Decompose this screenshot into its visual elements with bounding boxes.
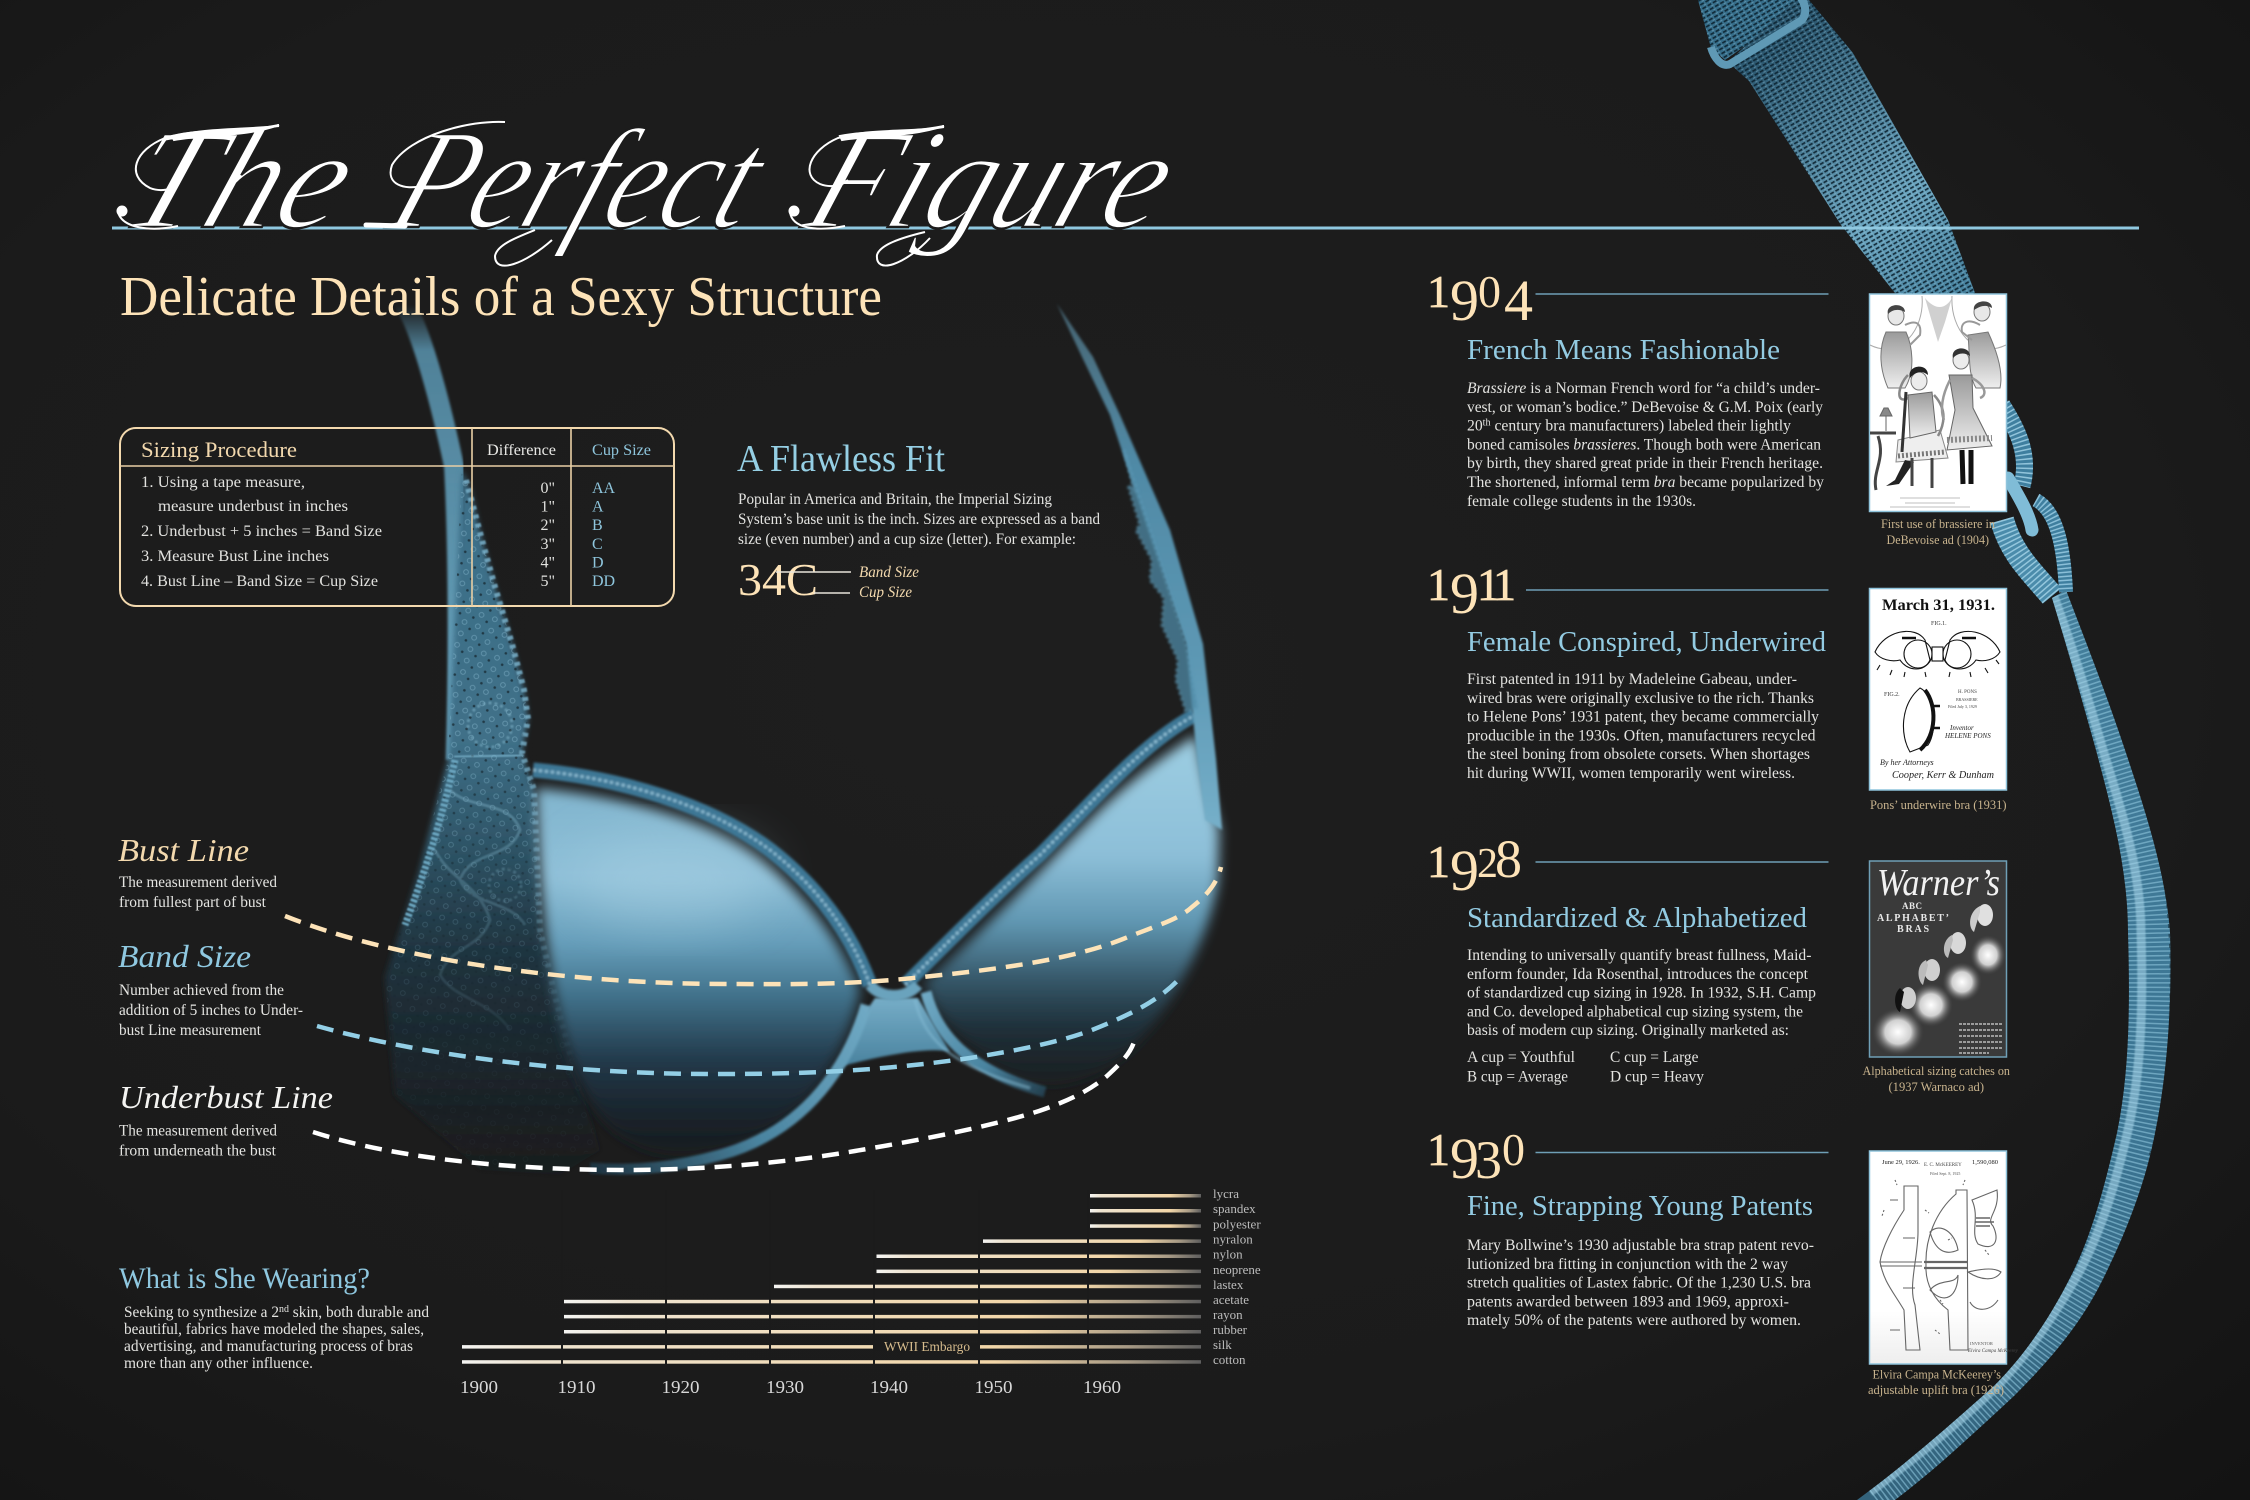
what is she wearing text: beautiful, fabrics have modeled the shapes, sales,: [124, 1321, 424, 1338]
sizing table: 5": [540, 573, 555, 590]
section 1904: female college students in the 1930s.: [1467, 493, 1696, 510]
figure 2: underwire patent: Cooper, Kerr & Dunham: [1892, 769, 1994, 781]
figure 3: Warner's ad: BRAS: [1897, 924, 1929, 935]
sizing table: Sizing Procedure: [141, 437, 297, 462]
section 1904: [1427, 266, 1828, 510]
figure 2: underwire patent: FIG.2.: [1884, 692, 1900, 698]
band size dashed curve: [317, 978, 1180, 1074]
fabric timeline chart: 1950: [974, 1377, 1012, 1397]
what is she wearing text: What is She Wearing?: [119, 1262, 370, 1295]
fabric timeline chart: 1920: [662, 1377, 700, 1397]
section 1928: A cup = Youthful: [1467, 1049, 1575, 1066]
section 1928: enform founder, Ida Rosenthal, introduces the concept: [1467, 966, 1809, 983]
underbust line label: The measurement derived: [119, 1122, 277, 1140]
title: The: [106, 100, 378, 258]
bust line label: from fullest part of bust: [119, 894, 267, 911]
sizing table: B: [592, 517, 603, 534]
underbust line label: [119, 1079, 333, 1160]
fabric timeline chart: silk: [1213, 1337, 1232, 1352]
year 1928: 1: [1427, 836, 1450, 887]
elastic strap: [1850, 585, 2180, 1500]
clip: [2008, 478, 2032, 530]
what is she wearing text: nd: [279, 1304, 289, 1315]
sizing table: DD: [592, 573, 615, 590]
sizing table: 0": [540, 480, 555, 497]
right lace: [1124, 450, 1198, 712]
fabric timeline chart: 1940: [870, 1377, 908, 1397]
a flawless fit: Popular in America and Britain, the Imperial Sizing: [738, 491, 1052, 508]
year 1911: 1: [1427, 559, 1450, 610]
bust line label: The measurement derived: [119, 874, 277, 891]
section 1911: the steel boning from obsolete corsets. When shortages: [1467, 746, 1810, 763]
year 1904: 4: [1504, 268, 1533, 333]
what is she wearing text: [119, 1262, 429, 1372]
section 1928: [1427, 829, 1828, 1086]
bust line label: [118, 832, 277, 911]
band size label: Number achieved from the: [119, 982, 284, 999]
fabric timeline chart: 1930: [766, 1377, 804, 1397]
year 1928: 8: [1495, 829, 1522, 889]
bra photograph: [385, 300, 1222, 1175]
a flawless fit: [737, 438, 1100, 605]
caption 1937: (1937 Warnaco ad): [1888, 1079, 1984, 1094]
section 1904: by birth, they shared great pride in their French heritage.: [1467, 455, 1823, 472]
caption 1904: DeBevoise ad (1904): [1886, 532, 1989, 547]
figure 2: underwire patent: FIG.1.: [1931, 621, 1947, 627]
fabric timeline chart: cotton: [1213, 1352, 1246, 1367]
bust line dashed curve: [285, 867, 1221, 984]
caption 1926: Elvira Campa McKeerey’s: [1872, 1366, 2001, 1382]
section 1904: Brassiere is a Norman French word for “a child’s under-: [1467, 380, 1820, 397]
bust line label: Bust Line: [118, 832, 249, 868]
section 1911: First patented in 1911 by Madeleine Gabeau, under-: [1467, 671, 1797, 688]
fabric timeline chart: rubber: [1213, 1322, 1248, 1337]
webbing above slider: [1698, 0, 1802, 60]
section 1928: C cup = Large: [1610, 1049, 1699, 1066]
sizing table: Cup Size: [592, 442, 651, 459]
section 1911: to Helene Pons’ 1931 patent, they became commercially: [1467, 708, 1819, 726]
sizing table: 4": [540, 554, 555, 572]
figure 2: underwire patent: H. PONS: [1958, 690, 1977, 695]
section 1911: Female Conspired, Underwired: [1467, 626, 1826, 658]
figure 2: underwire patent: March 31, 1931.: [1882, 597, 1995, 614]
year 1928: 9: [1450, 838, 1479, 903]
section 1930: patents awarded between 1893 and 1969, approxi-: [1467, 1294, 1789, 1310]
title rule: [112, 226, 2139, 230]
year 1911: 1: [1477, 559, 1500, 610]
figure 4: patent drawing: INVENTOR: [1970, 1341, 1993, 1346]
sizing table: 2. Underbust + 5 inches = Band Size: [141, 523, 382, 540]
figure 4: patent drawing: June 29, 1926.: [1882, 1159, 1920, 1166]
year 1904: 1: [1427, 266, 1450, 317]
year 1930: 9: [1450, 1126, 1479, 1191]
fabric timeline chart: lycra: [1213, 1186, 1239, 1201]
section 1911: wired bras were originally exclusive to the rich. Thanks: [1467, 690, 1814, 707]
year 1904: 9: [1450, 268, 1479, 333]
fabric timeline chart: 1960: [1083, 1377, 1121, 1397]
sizing table: 4. Bust Line – Band Size = Cup Size: [141, 573, 378, 590]
fabric timeline chart: [460, 1186, 1261, 1397]
title: [106, 100, 1198, 266]
section 1904: century bra manufacturers) labeled their lightly: [1491, 418, 1791, 434]
a flawless fit: 34C: [738, 554, 818, 605]
gore: [842, 998, 950, 1066]
sizing table: Difference: [487, 442, 556, 459]
underbust dashed curve: [313, 1042, 1134, 1170]
sizing table: 2": [540, 517, 555, 534]
section 1928: Standardized & Alphabetized: [1467, 902, 1807, 934]
what is she wearing text: advertising, and manufacturing process of bras: [124, 1338, 413, 1355]
title swashes: [118, 122, 944, 266]
section 1930: Mary Bollwine’s 1930 adjustable bra strap patent revo-: [1467, 1237, 1814, 1254]
cup bindings and underwires: [533, 715, 1195, 1169]
section 1930: lutionized bra fitting in conjunction with the 2 way: [1467, 1256, 1788, 1273]
right loop arm: [2036, 500, 2066, 592]
year 1930: 0: [1502, 1124, 1525, 1175]
sizing table: D: [592, 554, 604, 572]
fabric timeline chart: nyralon: [1213, 1232, 1253, 1246]
section 1928: B cup = Average: [1467, 1068, 1568, 1086]
section 1911: producible in the 1930s. Often, manufacturers recycled: [1467, 728, 1816, 744]
figure 2: underwire patent: By her Attorneys: [1880, 758, 1934, 767]
caption 1904: [1881, 516, 1995, 547]
section 1904: 20: [1467, 418, 1482, 434]
figure 3: Warner's ad: ALPHABET’: [1877, 913, 1949, 924]
lingerie strap: [1698, 0, 2180, 1500]
caption 1926: adjustable uplift bra (1926): [1868, 1382, 2004, 1397]
what is she wearing text: skin, both durable and: [289, 1304, 429, 1321]
figure 2: underwire patent: Inventor: [1949, 724, 1974, 732]
section 1928: and Co. developed alphabetical cup sizing system, the: [1467, 1004, 1803, 1020]
right strap: [1057, 304, 1222, 830]
sizing table: measure underbust in inches: [158, 498, 348, 515]
caption 1931: Pons’ underwire bra (1931): [1870, 797, 2006, 812]
band size label: Band Size: [118, 938, 251, 974]
title: Perfect: [373, 100, 789, 258]
sizing table: AA: [592, 480, 616, 497]
sizing table: A: [592, 498, 604, 516]
figure 1: brassiere ad: [1870, 294, 2006, 512]
twisted band: [2002, 405, 2025, 486]
caption 1937: [1862, 1063, 2010, 1094]
caption 1926: [1868, 1366, 2004, 1397]
section 1930: stretch qualities of Lastex fabric. Of the 1,230 U.S. bra: [1467, 1274, 1811, 1292]
lace side panel: [385, 470, 600, 1175]
fabric timeline chart: rayon: [1213, 1307, 1243, 1322]
figure 4: patent drawing: Filed Sept. 8, 1925: [1930, 1171, 1960, 1177]
sizing table: C: [592, 536, 603, 553]
figure 4: patent drawing: [1870, 1151, 2019, 1364]
year 1911: 1: [1493, 559, 1516, 610]
subtitle: Delicate Details of a Sexy Structure: [120, 266, 882, 328]
figure 2: underwire patent: BRASSIERE: [1956, 697, 1978, 702]
figure 4: patent drawing: 1,590,080: [1972, 1159, 1998, 1166]
year 1928: 2: [1477, 841, 1498, 887]
sizing table: 1. Using a tape measure,: [141, 474, 305, 491]
band size label: [118, 938, 303, 1039]
section 1904: French Means Fashionable: [1467, 334, 1780, 366]
caption 1904: First use of brassiere in: [1881, 516, 1995, 531]
figure 3: Warner's ad: [1870, 861, 2006, 1057]
a flawless fit: System’s base unit is the inch. Sizes are expressed as a band: [738, 511, 1100, 528]
fabric timeline chart: spandex: [1213, 1201, 1256, 1216]
slider ring: [1711, 0, 1805, 65]
year 1904: 0: [1478, 266, 1501, 317]
what is she wearing text: Seeking to synthesize a 2: [124, 1304, 281, 1321]
section 1904: boned camisoles brassieres. Though both were American: [1467, 436, 1821, 454]
figure 3: Warner's ad: ABC: [1902, 901, 1922, 911]
figure 4: patent drawing: Elvira Campa McKeerey: [1967, 1349, 2019, 1354]
caption 1937: Alphabetical sizing catches on: [1862, 1063, 2010, 1078]
what is she wearing text: more than any other influence.: [124, 1355, 313, 1372]
a flawless fit: Band Size: [859, 564, 919, 581]
a flawless fit: Cup Size: [859, 584, 912, 601]
section 1928: Intending to universally quantify breast fullness, Maid-: [1467, 947, 1811, 964]
sizing table: 3": [540, 536, 555, 553]
section 1928: of standardized cup sizing in 1928. In 1932, S.H. Camp: [1467, 984, 1816, 1002]
figure 2: underwire patent: [1870, 588, 2006, 790]
fabric timeline chart: neoprene: [1213, 1262, 1261, 1277]
figure 4: patent drawing: E. C. McKEEREY: [1924, 1163, 1962, 1168]
figure 2: underwire patent: Filed July 3, 1929: [1948, 704, 1977, 710]
wide webbing: [1728, 0, 2008, 460]
left loop arm: [2002, 520, 2052, 596]
section 1904: vest, or woman’s bodice.” DeBevoise & G.M. Poix (early: [1467, 399, 1823, 416]
a flawless fit: size (even number) and a cup size (letter). For example:: [738, 531, 1076, 548]
underbust line label: from underneath the bust: [119, 1142, 277, 1160]
section 1904: th: [1483, 418, 1491, 428]
section 1911: [1427, 559, 1828, 782]
sizing table: [120, 428, 674, 606]
section 1930: Fine, Strapping Young Patents: [1467, 1190, 1813, 1222]
figure 3: Warner's ad: Warner’s: [1877, 862, 2000, 904]
year 1930: 3: [1475, 1130, 1502, 1190]
fabric timeline chart: WWII Embargo: [884, 1340, 970, 1355]
band size label: bust Line measurement: [119, 1022, 262, 1039]
year 1930: 1: [1427, 1124, 1450, 1175]
fabric timeline chart: lastex: [1213, 1277, 1244, 1292]
sizing table: 3. Measure Bust Line inches: [141, 548, 329, 565]
section 1928: D cup = Heavy: [1610, 1068, 1704, 1086]
left strap: [402, 300, 458, 760]
section 1904: The shortened, informal term bra became popularized by: [1467, 474, 1824, 491]
left cup: [536, 788, 860, 1156]
a flawless fit: A Flawless Fit: [737, 438, 945, 480]
fabric timeline chart: acetate: [1213, 1292, 1249, 1307]
section 1928: basis of modern cup sizing. Originally marketed as:: [1467, 1022, 1789, 1039]
sizing table: 1": [540, 498, 555, 516]
fabric timeline chart: 1910: [558, 1377, 596, 1397]
section 1911: hit during WWII, women temporarily went wireless.: [1467, 765, 1795, 782]
title: Figure: [788, 100, 1198, 258]
year 1911: 9: [1450, 561, 1479, 626]
section 1930: mately 50% of the patents were authored by women.: [1467, 1312, 1801, 1329]
fabric timeline chart: nylon: [1213, 1246, 1243, 1262]
fabric timeline chart: 1900: [460, 1377, 498, 1397]
band size label: addition of 5 inches to Under-: [119, 1002, 303, 1019]
fabric timeline chart: polyester: [1213, 1216, 1261, 1232]
figure 2: underwire patent: HELENE PONS: [1944, 732, 1991, 740]
underbust line label: Underbust Line: [119, 1079, 333, 1115]
right cup: [925, 735, 1219, 1085]
section 1930: [1427, 1124, 1828, 1329]
